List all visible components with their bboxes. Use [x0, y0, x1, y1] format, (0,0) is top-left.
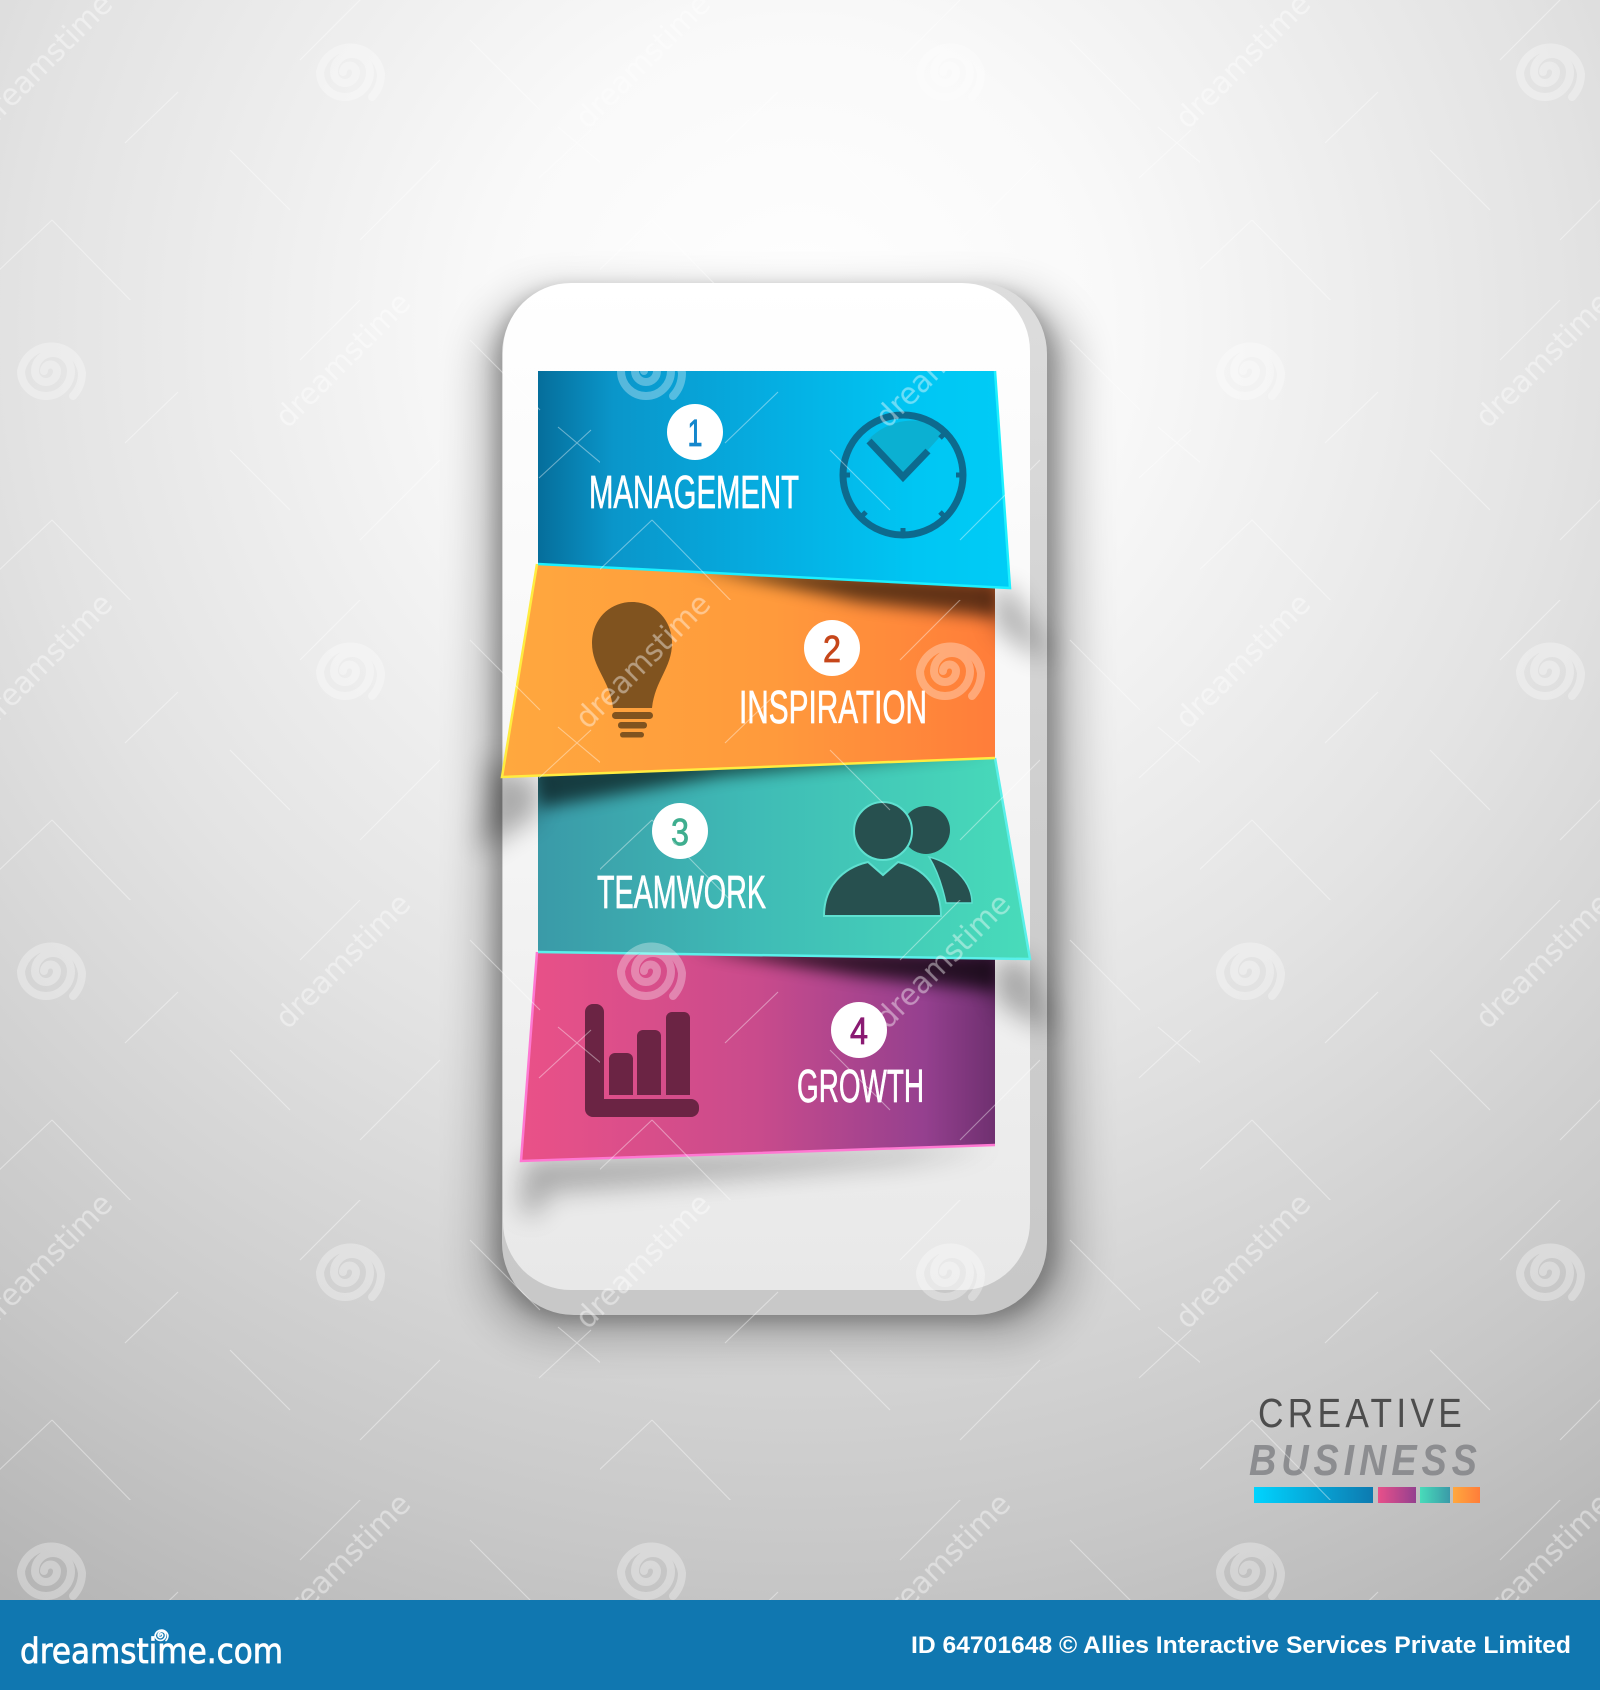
- phone wide drop shadow: [478, 290, 1078, 1340]
- shadow of panel 2 on panel 3: [538, 760, 960, 816]
- footer background: [0, 1600, 1600, 1690]
- label: inspiration: INSPIRATION: [739, 681, 927, 733]
- panel 1 edge highlight: [538, 371, 1010, 588]
- footer logo: dreamstime.com: dreamstime.com: [20, 1632, 283, 1672]
- icon: people: [824, 802, 972, 916]
- number badge 3: [652, 803, 708, 859]
- panel 4 background: [521, 952, 995, 1161]
- watermark text: dreamstime: [869, 887, 1018, 1036]
- icon: light bulb: [592, 602, 672, 738]
- logo word: business: BUSINESS: [1249, 1435, 1477, 1485]
- clock hands: [869, 441, 928, 477]
- label: teamwork: TEAMWORK: [597, 866, 766, 918]
- front person: [824, 802, 941, 916]
- number badge 3: 3: [671, 812, 689, 854]
- watermark text: dreamstime: [869, 1487, 1018, 1636]
- panel 1: management: [538, 371, 1010, 588]
- number badge 4: [831, 1002, 887, 1058]
- clock highlighted wedge: [868, 421, 946, 477]
- phone body side: [502, 282, 1047, 1315]
- phone tight edge shadow: [494, 290, 1058, 1322]
- phone screen face: [503, 283, 1030, 1290]
- clock ticks: [842, 432, 964, 536]
- watermark text: dreamstime: [569, 587, 718, 736]
- shadow under panel 4: [520, 1147, 995, 1215]
- number badge 1: 1: [688, 413, 702, 455]
- number badge 2: 2: [823, 629, 841, 671]
- watermark text: dreamstime: [1169, 587, 1318, 736]
- number badge 2: [804, 620, 860, 676]
- clock ring: [843, 415, 963, 535]
- watermark text: dreamstime: [269, 887, 418, 1036]
- panel 1 background: [538, 371, 1010, 588]
- shadow of panel 1 on panel 2: [690, 566, 1000, 618]
- watermark text: dreamstime: [1169, 1187, 1318, 1336]
- shadow of panel 3 on panel 4: [690, 948, 1000, 992]
- shadow of panel 3 outside panel 4: [995, 958, 1052, 1030]
- label: growth: GROWTH: [797, 1060, 924, 1112]
- panel 3: teamwork: [538, 758, 1030, 959]
- panel 4 edge highlight: [521, 952, 995, 1161]
- phone: [478, 282, 1078, 1340]
- footer credit: ID 64701648 © Allies Interactive Services Private Limited: [911, 1632, 1571, 1659]
- number badge 1: [667, 404, 723, 460]
- shadow of panel 1 outside panel 2: [995, 585, 1052, 658]
- panel 2 edge highlight: [502, 564, 995, 777]
- number badge 4: 4: [850, 1011, 868, 1053]
- watermark text: dreamstime: [269, 286, 418, 435]
- shadow of panel 2 outside panel 3: [480, 752, 538, 852]
- watermark text: dreamstime: [269, 1487, 418, 1636]
- footer bar: [0, 1600, 1600, 1690]
- panel 3 edge highlight: [538, 758, 1030, 959]
- icon: bar chart: [585, 1004, 699, 1117]
- creative business logo: [1249, 1391, 1480, 1503]
- logo colour bars: [1254, 1487, 1480, 1503]
- panel 3 background: [538, 758, 1030, 959]
- panel 2: inspiration: [502, 564, 995, 777]
- panel 4: growth: [521, 952, 995, 1161]
- watermark text: dreamstime: [869, 286, 1018, 435]
- label: management: MANAGEMENT: [589, 466, 799, 518]
- back person: [902, 806, 972, 903]
- logo word: creative: CREATIVE: [1258, 1391, 1462, 1437]
- panel 2 background: [502, 564, 995, 777]
- icon: clock: [842, 415, 964, 536]
- watermark text: dreamstime: [569, 1187, 718, 1336]
